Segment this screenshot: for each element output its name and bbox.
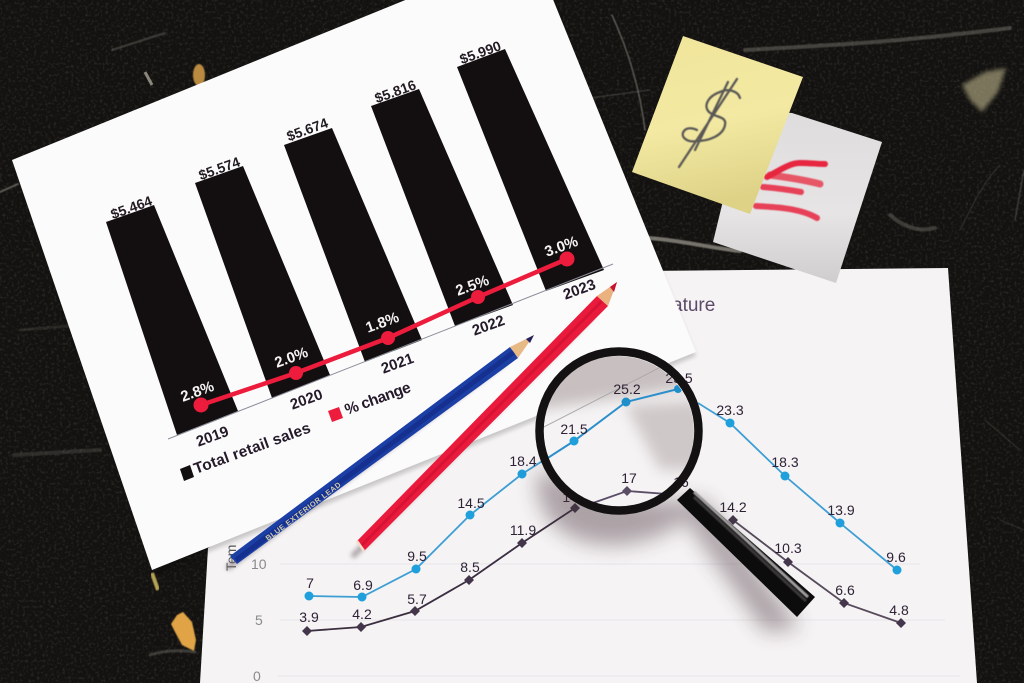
percent labels: 2.5% xyxy=(453,272,491,300)
blue line series: 25.5 xyxy=(665,370,693,386)
blue line series: 7 xyxy=(306,575,314,591)
legend xyxy=(180,379,414,481)
blue line series: 18.4 xyxy=(509,453,537,469)
dark line series: 3.9 xyxy=(299,609,319,625)
blue line series: 14.5 xyxy=(457,495,485,511)
year labels: 2023 xyxy=(561,276,598,303)
blue line series: 23.3 xyxy=(716,402,744,418)
red pencil xyxy=(357,282,617,551)
magnifier shadow xyxy=(537,470,800,632)
percent change line xyxy=(194,252,574,412)
bar value labels: $5.816 xyxy=(372,76,418,106)
bar value labels: $5.674 xyxy=(284,114,330,144)
blue line series: 13.9 xyxy=(827,502,855,518)
handle xyxy=(677,488,815,617)
percent labels: 2.0% xyxy=(272,344,310,372)
percent labels xyxy=(178,233,580,406)
dark line series: 10.3 xyxy=(774,540,802,556)
lens contents: 16 xyxy=(673,474,689,490)
legend: % change xyxy=(343,379,414,419)
blue line series xyxy=(304,370,906,602)
front paper: retail sales bar chart xyxy=(12,0,696,570)
baseline xyxy=(168,264,613,439)
dark line series: 16 xyxy=(673,474,689,490)
dark line series xyxy=(299,474,909,636)
pencil shadows xyxy=(229,318,590,567)
dark line series: 5.7 xyxy=(407,591,427,607)
magnifying glass xyxy=(535,345,815,617)
percent labels: 1.8% xyxy=(363,309,401,337)
bars xyxy=(106,49,604,435)
blue line series: 18.3 xyxy=(771,454,799,470)
y axis labels: 10 xyxy=(251,556,267,572)
lens rim xyxy=(540,352,698,510)
percent labels: 3.0% xyxy=(542,233,580,261)
bar value labels: $5.464 xyxy=(108,192,154,222)
year labels: 2020 xyxy=(288,386,325,413)
y axis labels: 5 xyxy=(255,612,263,628)
dollar sign drawing xyxy=(679,79,740,167)
year labels: 2019 xyxy=(194,423,231,450)
dark line series: 14.2 xyxy=(719,499,747,515)
legend: Total retail sales xyxy=(192,420,313,478)
dark line series: 8.5 xyxy=(460,559,480,575)
blue line series: 6.9 xyxy=(353,577,373,593)
dark line series: 6.6 xyxy=(835,582,855,598)
blue line series: 9.6 xyxy=(886,549,906,565)
front paper shadow xyxy=(18,4,696,576)
lens contents: 25.2 xyxy=(613,381,641,397)
back paper: temperature line chart xyxy=(200,268,977,683)
dark line series: 4.2 xyxy=(352,606,372,622)
bar value labels: $5.990 xyxy=(457,37,503,67)
lens contents xyxy=(544,356,694,506)
percent labels: 2.8% xyxy=(178,378,216,406)
year labels: 2021 xyxy=(379,350,416,377)
lens contents: 17 xyxy=(621,470,637,486)
lens contents: 25.5 xyxy=(665,370,693,386)
dark line series: 14.2 xyxy=(562,489,590,505)
red marker lines xyxy=(756,163,825,218)
blue pencil xyxy=(230,335,534,564)
grid lines xyxy=(278,564,960,676)
year labels xyxy=(194,276,598,450)
lens contents: 21.5 xyxy=(560,421,588,437)
pencil imprint text: BLUE EXTERIOR LEAD xyxy=(264,480,343,543)
bar value labels xyxy=(108,37,503,222)
rotated axis title fragment: Tem xyxy=(223,545,239,571)
blue line series: 9.5 xyxy=(407,548,427,564)
dark line series: 11.9 xyxy=(510,522,536,538)
y axis labels xyxy=(251,556,267,683)
yellow sticky note with dollar sign xyxy=(632,36,803,214)
chart heading fragment: ature xyxy=(672,295,715,316)
white sticky note with red marker lines xyxy=(713,110,882,283)
bar value labels: $5.574 xyxy=(196,153,242,183)
year labels: 2022 xyxy=(470,312,507,339)
dark line series: 4.8 xyxy=(889,602,909,618)
